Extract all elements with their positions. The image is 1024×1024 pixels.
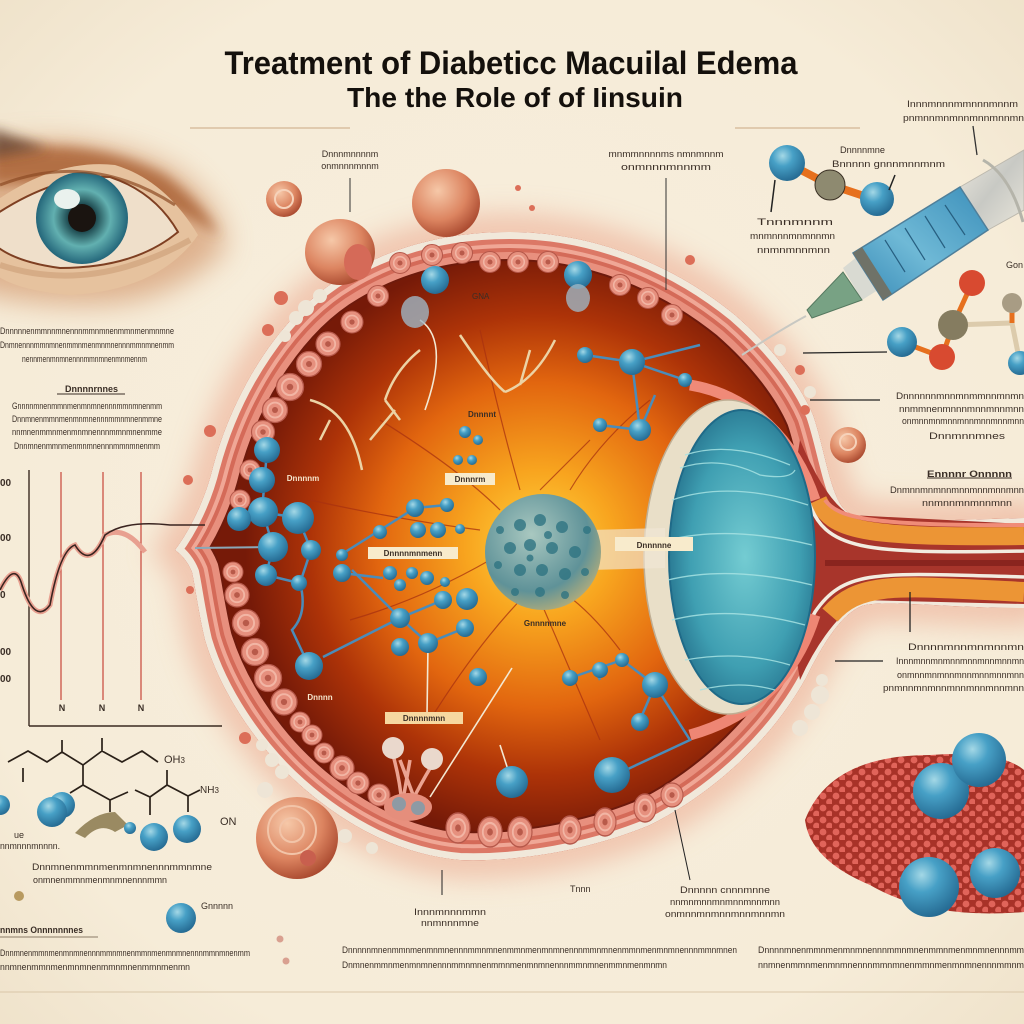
text block: right: Dnmnnmnmnnmnnmnnmnnmnn <box>890 485 1024 495</box>
text block: bottom captions: onmnenmmnmenmnmnennnmmn <box>33 875 167 885</box>
central nerve line <box>825 560 1024 566</box>
pale nerve fibres <box>310 335 555 470</box>
line chart: 00 <box>0 533 12 544</box>
text block: bottom captions: Dnnmnenmmnmenmnmnennnmmnmne <box>32 862 212 872</box>
text block: top small labels: nnmnmnnmnn <box>757 245 830 255</box>
chemical structure: ON <box>220 816 237 828</box>
icon: outer eye photo <box>0 128 225 305</box>
title <box>224 45 798 113</box>
line chart: 00 <box>0 647 12 658</box>
line chart: N <box>99 703 105 713</box>
text block: bottom captions: nnmns Onnnnnnnes <box>0 925 83 935</box>
wall and fundus <box>175 232 1024 860</box>
text block: bottom captions: ue <box>14 830 24 840</box>
icon: molecule right: Gon <box>1006 260 1023 270</box>
line chart <box>0 470 222 726</box>
text block: top small labels: pnmnnmnmnnmnnmnnmn <box>903 113 1024 123</box>
labels inside eye: Dnnnnm <box>287 474 319 483</box>
labels inside eye: Dnnnrm <box>455 475 485 484</box>
labels inside eye: Gnnnnmne <box>524 619 567 628</box>
text block: top small labels <box>321 99 1024 290</box>
nerve fill <box>780 440 1024 680</box>
labels inside eye: Dnnnnmnmenn <box>384 549 442 558</box>
chemical structure <box>0 738 237 933</box>
upper nerve bands <box>818 500 1024 536</box>
text block: bottom captions <box>0 810 1024 992</box>
text block: right: pnmnnmnmnnmnnmnnmnnmnn <box>883 683 1024 693</box>
retinal cell ring <box>223 242 683 847</box>
text block: left upper: Dnnmnenmmnmenmnmnennnmmnmnenmmne <box>12 414 162 424</box>
text block: top small labels: Bnnnnn gnnnmnnmnm <box>832 159 945 169</box>
text block: left upper <box>0 326 174 451</box>
panel: lens and optic nerve <box>644 385 1024 735</box>
icon: stalked cells at bottom <box>382 737 443 821</box>
icon: red tissue with blue spheres <box>805 733 1024 917</box>
line chart: N <box>59 703 65 713</box>
line chart: 00 <box>0 674 12 685</box>
main eye cross-section <box>175 232 1024 860</box>
lens fibres <box>668 449 812 690</box>
text block: right: Innnmnnmnmnnmnnmnnmnnmn <box>896 656 1024 666</box>
text block: right: nnmmnenmnnnmnnmnnmnn <box>899 404 1024 414</box>
text block: left upper: Dnmnennnmmnmnenmmnmenmnmnennnmmnmnenmm <box>0 340 174 350</box>
icon: molecule top right <box>769 145 895 216</box>
text block: bottom captions: nnmnenmmnmenmnmnennnmmnmnenmmnmenmnmnennnmmnm <box>758 960 1024 970</box>
text block: left upper: nennmenmnmnennnmmnmnenmnmennm <box>22 354 147 364</box>
text block: left upper: Dnnmnenmmnmenmnmnennnmmnmnenmm <box>14 441 160 451</box>
text block: bottom captions: Innnmnnnmmn <box>414 907 486 917</box>
pink bands around lens <box>690 385 815 500</box>
text block: left upper: Dnnnnrnnes <box>65 384 118 394</box>
labels inside eye: Dnnnnne <box>637 541 672 550</box>
line chart: 0 <box>0 590 6 601</box>
cream tissue bumps <box>256 289 829 854</box>
outer halo <box>175 232 1024 860</box>
icon: nucleus with beam <box>485 494 665 610</box>
text block: top small labels: mnmnnnmnmnnmn <box>750 231 835 241</box>
icons: peach cells on eye wall <box>183 169 866 879</box>
text block: left upper: Gnnnnmnenmmnmenmnmnennnmmnmnenmm <box>12 401 162 411</box>
network: insulin molecules <box>195 261 700 798</box>
text block: right: onmnnmnmnnmnnmnnmnnmnn <box>897 670 1024 680</box>
line chart: N <box>138 703 144 713</box>
title: The the Role of of Iinsuin <box>347 82 683 113</box>
text block: top small labels: Tnnnmnnm <box>757 217 833 227</box>
text block: left upper: nnmnenmmnmenmnmnennnmmnmnenmme <box>12 427 162 437</box>
text block: bottom captions: nnmnnnmnnnn. <box>0 841 60 851</box>
text block: left upper: Dnnnnnenmmnnmnennnmmnmnenmmnmenmnmne <box>0 326 174 336</box>
text block: bottom captions: Dnnnnnmnenmmnmenmnmnennnmmnmnenmmnmenmnmnennnmmnmnenmmnmenmnmnennnmmnmnen <box>342 945 737 955</box>
lens capsule <box>644 400 812 714</box>
icon: molecule right <box>887 260 1024 375</box>
text block: right: Dnnnnnnmnnmnmmnnmnmn <box>896 391 1024 401</box>
text block: top small labels: Innnmnnnmmnnnmnnm <box>907 99 1018 109</box>
retinal vessels <box>310 330 650 740</box>
text block: right <box>803 352 1024 693</box>
text block: bottom captions: Dnnnnn cnnnmnne <box>680 885 770 895</box>
labels inside eye: Dnnnnmnn <box>403 714 445 723</box>
text block: right: Dnnmnnmnes <box>929 431 1006 441</box>
chemical structure: NH3 <box>200 785 219 796</box>
text block: top small labels: Dnnnmnnnnm <box>322 149 378 159</box>
text block: right: Dnnnnmnnmnmnnmn <box>908 642 1024 652</box>
labels inside eye: Dnnnnt <box>468 410 496 419</box>
text block: top small labels: Dnnnnmne <box>840 145 885 155</box>
labels inside eye: GNA <box>472 292 490 301</box>
text block: bottom captions: Dnnmnenmmnmenmnmnennnmmnmnenmmnmenmnmnennnmmnmnenmm <box>0 948 250 958</box>
text block: bottom captions: nnmnmnnmnmnnmnnmnn <box>670 897 780 907</box>
text block: bottom captions: Tnnn <box>570 884 591 894</box>
text block: bottom captions: Gnnnnn <box>201 901 233 911</box>
text block: right: nnmnnmnmnnmnn <box>922 498 1012 508</box>
text block: bottom captions: nnmnnnmne <box>421 918 479 928</box>
title rules <box>190 127 860 129</box>
text block: top small labels: onmnnnmnnmm <box>621 162 711 172</box>
text block: top small labels: onmnnnmnnm <box>321 161 379 171</box>
title: Treatment of Diabeticc Macuilal Edema <box>224 45 798 81</box>
text block: right: Ennnnr Onnnnn <box>927 469 1012 479</box>
chemical structure: OH3 <box>164 754 186 766</box>
text block: bottom captions: nnmnenmmnmenmnmnenmmnmnenmmnmenmn <box>0 962 190 972</box>
line chart: 00 <box>0 478 12 489</box>
lens <box>669 410 815 704</box>
text block: bottom captions: Dnmnenmmnmenmnmnennnmmnmnenmmnmenmnmnennnmmnmnenmmnmenmnmn <box>342 960 667 970</box>
labels inside eye: Dnnnn <box>307 693 333 702</box>
lower nerve bands <box>830 587 1024 615</box>
text block: bottom captions: Dnnnnmnenmmnmenmnmnennnmmnmnenmmnmenmnmnennnmm <box>758 945 1024 955</box>
labels inside eye <box>287 292 693 724</box>
icon: syringe <box>742 150 1024 355</box>
text block: top small labels: mnmmnnnnms nmnmnnm <box>608 149 724 159</box>
text block: bottom captions: onmnnmnmnnmnnmnnmn <box>665 909 785 919</box>
